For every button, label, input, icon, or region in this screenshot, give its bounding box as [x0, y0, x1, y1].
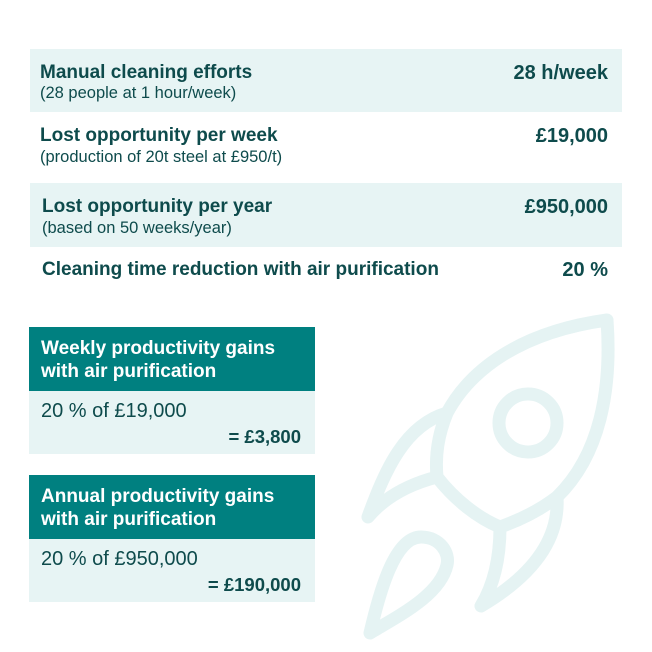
- row: manual cleaning: 28 h/week: [513, 62, 608, 84]
- box: weekly gains: [29, 327, 315, 454]
- box: annual gains: 20 % of £950,000: [41, 548, 198, 570]
- box: weekly gains: 20 % of £19,000: [41, 400, 187, 422]
- row: lost per week: £19,000: [536, 125, 608, 147]
- box: annual gains: with air purification: [41, 509, 216, 530]
- box: weekly gains: = £3,800: [228, 426, 301, 447]
- box: weekly gains: with air purification: [41, 361, 216, 382]
- box: annual gains: [29, 475, 315, 602]
- row: lost per year: £950,000: [525, 196, 608, 218]
- row: lost per week: (production of 20t steel at £950/t): [40, 148, 282, 166]
- box: annual gains: Annual productivity gains: [41, 486, 274, 507]
- box: weekly gains: Weekly productivity gains: [41, 338, 275, 359]
- row: reduction: 20 %: [562, 259, 608, 281]
- row: lost per year: Lost opportunity per year: [42, 196, 272, 217]
- row: lost per year: [30, 183, 622, 247]
- row: reduction: Cleaning time reduction with air purification: [42, 259, 439, 280]
- row: reduction: [42, 259, 608, 281]
- row: lost per year: (based on 50 weeks/year): [42, 219, 232, 237]
- row: manual cleaning: (28 people at 1 hour/week): [40, 84, 236, 102]
- row: lost per week: Lost opportunity per week: [40, 125, 278, 146]
- row: manual cleaning: [30, 49, 622, 112]
- row: lost per week: [40, 125, 608, 166]
- row: manual cleaning: Manual cleaning efforts: [40, 62, 252, 83]
- box: annual gains: = £190,000: [208, 574, 301, 595]
